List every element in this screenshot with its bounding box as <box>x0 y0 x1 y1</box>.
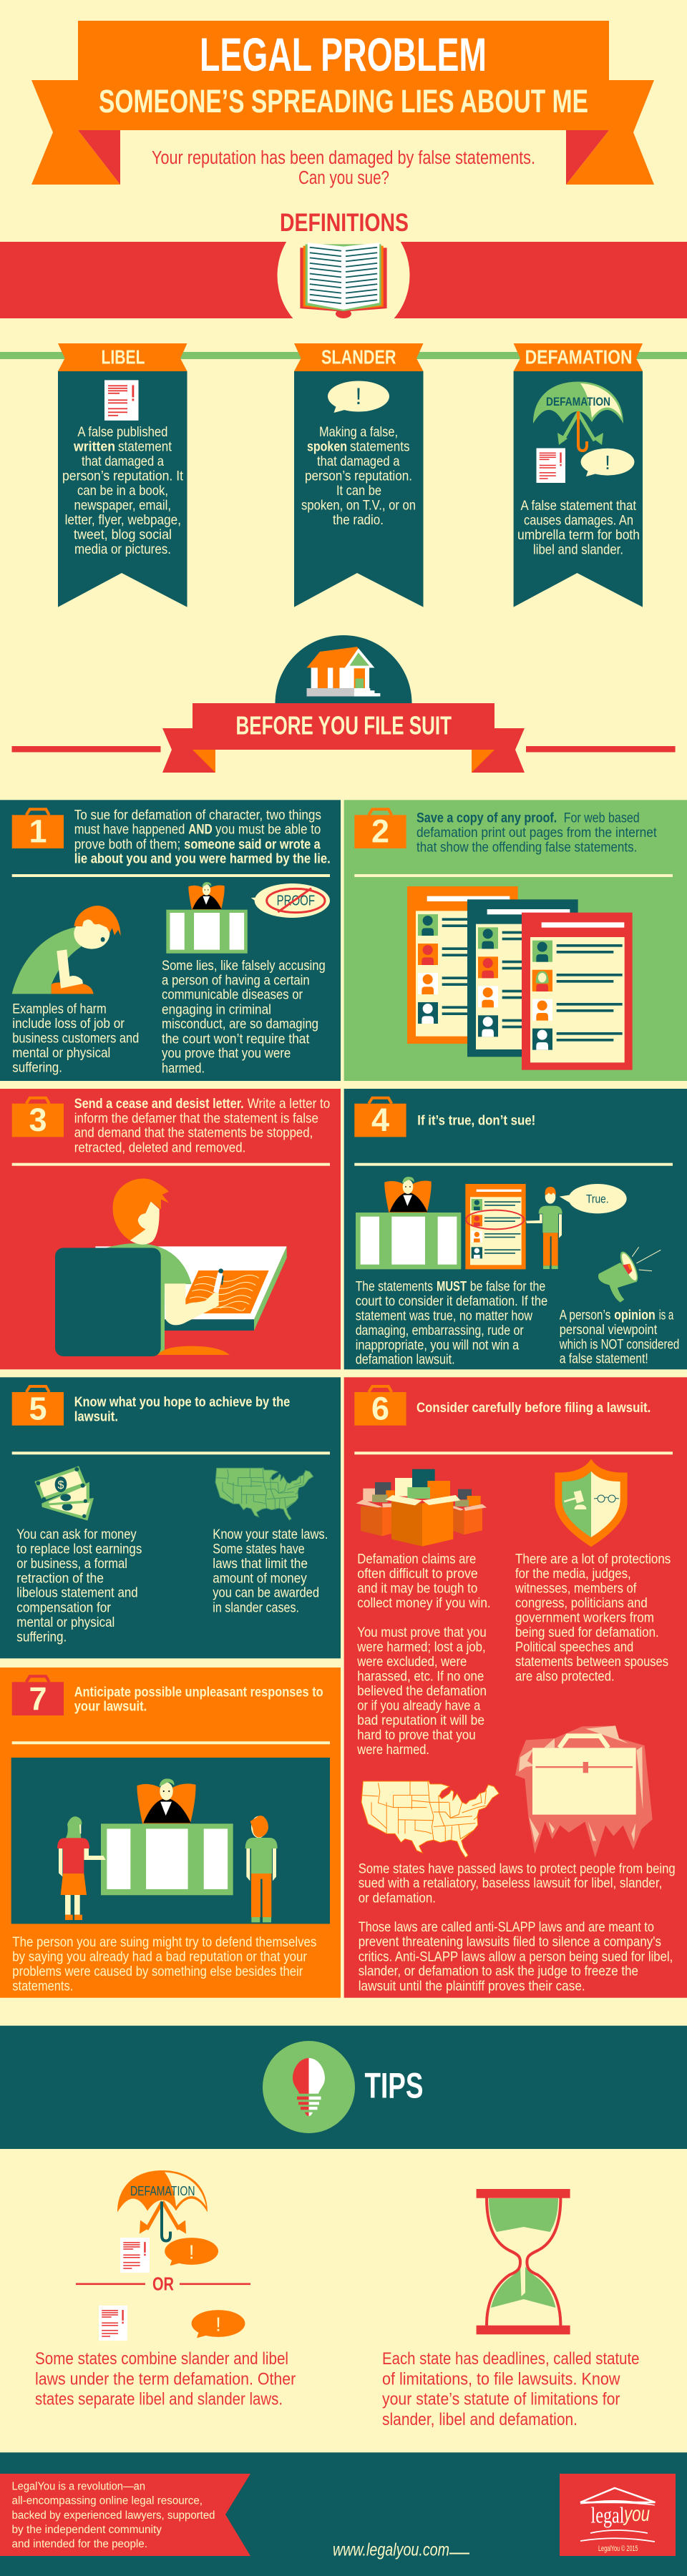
footer about ribbon: by the independent community <box>11 2524 162 2536</box>
defamation definition <box>517 498 640 558</box>
step 4 main text: statement was true, no matter how <box>356 1308 533 1323</box>
step 3 text: inform the defamer that the statement is false <box>74 1110 318 1126</box>
icon: combined speech bubble <box>165 2238 218 2266</box>
tip text: deadlines: of limitations, to file lawsuits. Know <box>382 2369 620 2389</box>
illustration: witness saying true <box>526 1184 627 1269</box>
step 6 protections text: congress, politicians and <box>515 1595 648 1611</box>
step 6 protections text: witnesses, members of <box>515 1580 637 1596</box>
icon: briefcase 5 <box>12 1386 64 1426</box>
panel: step 4 <box>344 1089 687 1369</box>
libel definition: statement <box>118 439 172 455</box>
icon: briefcase 2 <box>354 809 406 850</box>
step 1 harm text: mental or physical <box>12 1045 110 1061</box>
icon: small speech bubble <box>581 449 634 476</box>
step 3 text: Send a cease and desist letter. <box>74 1096 244 1112</box>
icon: separate document <box>99 2306 127 2341</box>
step 5 state laws text: in slander cases. <box>213 1600 299 1615</box>
illustration: printed pages <box>407 886 633 1070</box>
step 6 protections text: being sued for defamation. <box>515 1625 659 1640</box>
step 5 state laws text: laws that limit the <box>213 1556 308 1572</box>
panel: slander ribbon <box>294 343 424 607</box>
step 1 intro: you must be able to <box>215 822 321 838</box>
step 6 difficulty text: believed the defamation <box>357 1683 487 1699</box>
panel: defamation ribbon <box>514 343 643 607</box>
step 6 difficulty text: and it may be tough to <box>357 1580 477 1596</box>
step 6 difficulty text: were harmed; lost a job, <box>356 1639 486 1655</box>
panel: defamation ribbon: DEFAMATION <box>525 346 633 368</box>
step 6 difficulty text: often difficult to prove <box>357 1566 478 1582</box>
step 7 text: by saying you already had a bad reputation or that your <box>12 1949 307 1965</box>
panel: step 6 <box>344 1377 687 1998</box>
libel definition: person’s reputation. It <box>62 468 184 484</box>
slander definition <box>301 424 416 528</box>
step 6 protections text <box>515 1551 671 1684</box>
step 2 text: that show the offending false statements. <box>416 840 637 856</box>
step 7 heading: Anticipate possible unpleasant responses to <box>74 1684 323 1700</box>
panel: step 3 <box>0 1089 341 1369</box>
slander definition: the radio. <box>333 512 384 528</box>
step 1 lies text: the court won’t require that <box>162 1031 310 1047</box>
step 3 text: and demand that the statements be stopped, <box>74 1125 313 1141</box>
step 1 intro: To sue for defamation of character, two things <box>74 807 321 823</box>
panel: step 2 <box>344 800 687 1081</box>
step 1 harm text: business customers and <box>12 1031 139 1047</box>
step 1 harm text: include loss of job or <box>12 1016 125 1032</box>
icon: orange umbrella <box>117 2170 208 2240</box>
icon: briefcase 7: 7 <box>29 1680 47 1717</box>
step 1 lies text: misconduct, are so damaging <box>162 1017 318 1032</box>
step 5 money text: compensation for <box>16 1600 111 1615</box>
step 2 text: Save a copy of any proof. <box>416 810 557 826</box>
step 1 harm text: suffering. <box>12 1060 62 1076</box>
definitions band <box>0 209 687 342</box>
panel: libel ribbon <box>58 343 187 607</box>
illustration: judge <box>356 1177 461 1269</box>
illustration: courtroom scene <box>11 1758 330 1924</box>
footer about ribbon: and intended for the people. <box>11 2538 147 2550</box>
step 6 difficulty text: harassed, etc. If no one <box>357 1668 484 1684</box>
icon: briefcase 6: 6 <box>371 1391 389 1426</box>
slander definition: spoken, on T.V., or on <box>301 498 416 514</box>
step 5 state laws text: amount of money <box>213 1570 307 1586</box>
step 6 protections text: are also protected. <box>515 1668 615 1684</box>
step 6 protections text: government workers from <box>515 1610 654 1626</box>
step 6 difficulty text: or if you already have a <box>357 1698 480 1713</box>
step 7 text: statements. <box>12 1978 73 1994</box>
icon: briefcase 1 <box>12 809 64 850</box>
step 1 intro: someone said or wrote a <box>184 836 321 852</box>
footer about ribbon: all-encompassing online legal resource, <box>11 2495 203 2507</box>
step 5 heading <box>74 1394 290 1424</box>
step 1 intro: lie about you and you were harmed by the lie. <box>74 851 331 867</box>
illustration: distressed man <box>12 906 121 994</box>
title banner: LEGAL PROBLEM <box>200 28 487 81</box>
step 7 text <box>12 1934 317 1994</box>
step 5 money text <box>16 1527 142 1645</box>
tips band <box>0 2026 687 2149</box>
step 4 main text: defamation lawsuit. <box>356 1352 455 1368</box>
step 6 difficulty text: were harmed. <box>356 1742 429 1758</box>
icon: briefcase 4 <box>354 1098 406 1138</box>
step 1 lies text: harmed. <box>162 1060 205 1076</box>
icon: briefcase 4: 4 <box>371 1102 389 1138</box>
tip text: combine laws: states separate libel and slander laws. <box>35 2390 283 2409</box>
step 6 difficulty text: hard to prove that you <box>357 1728 476 1743</box>
step 4 main text <box>356 1278 547 1368</box>
step 5 heading: Know what you hope to achieve by the <box>74 1394 290 1410</box>
defamation definition: A false statement that <box>521 498 636 514</box>
step 5 state laws text: Know your state laws. <box>213 1527 328 1542</box>
step 5 money text: to replace lost earnings <box>16 1541 142 1557</box>
step 4 opinion text: opinion <box>614 1307 656 1323</box>
step 6 difficulty text: collect money if you win. <box>357 1595 491 1611</box>
panel: libel ribbon: LIBEL <box>102 346 145 368</box>
heading banner: before you file suit: BEFORE YOU FILE SUIT <box>236 711 452 740</box>
logo: legal <box>591 2502 625 2528</box>
libel definition <box>62 424 184 557</box>
illustration: witness saying true: True. <box>586 1192 609 1205</box>
intro text: Can you sue? <box>298 168 389 188</box>
slander definition: spoken <box>307 439 347 455</box>
footer <box>0 2452 687 2576</box>
defamation definition: libel and slander. <box>533 542 623 558</box>
step 2 text: defamation print out pages from the internet <box>416 825 657 841</box>
step 7 text: problems were caused by something else besides their <box>12 1964 303 1979</box>
step 6 anti-SLAPP text: slander, or defamation to ask the judge to freeze the <box>359 1964 638 1979</box>
icon: separate speech bubble <box>192 2310 245 2338</box>
step 4 main text: inappropriate, you will not win a <box>356 1338 519 1353</box>
step 2 text <box>416 810 657 856</box>
step 5 money text: mental or physical <box>16 1615 114 1630</box>
icon: shield with gavel and glasses <box>555 1459 628 1547</box>
step 4 main text: MUST <box>437 1278 467 1294</box>
step 1 harm text: Examples of harm <box>12 1001 107 1017</box>
icon: small speech bubble: ! <box>605 451 610 474</box>
illustration: boxes <box>356 1469 487 1547</box>
step 6 difficulty text: You must prove that you <box>357 1625 487 1640</box>
heading: tips: TIPS <box>365 2066 424 2106</box>
step 6 difficulty text: bad reputation it will be <box>357 1713 484 1728</box>
step 4 opinion text: a false statement! <box>560 1351 648 1367</box>
icon: money: $ <box>58 1479 64 1492</box>
libel definition: can be in a book, <box>77 483 168 499</box>
step 4 main text: be false for the <box>470 1278 545 1294</box>
step 6 difficulty text: Defamation claims are <box>357 1551 476 1567</box>
slander definition: Making a false, <box>319 424 398 440</box>
step 6 protections text: for the media, judges, <box>515 1566 631 1582</box>
illustration: judge with no proof bubble <box>166 882 330 954</box>
step 5 state laws text: Some states have <box>213 1541 305 1557</box>
step 5 state laws text <box>213 1527 328 1615</box>
defamation definition: causes damages. An <box>524 512 633 528</box>
icon: megaphone <box>598 1247 661 1303</box>
slander definition: It can be <box>336 483 381 499</box>
step 4 main text: court to consider it defamation. If the <box>356 1293 547 1309</box>
step 2 text: For web based <box>564 810 640 826</box>
icon: speech bubble <box>328 381 389 413</box>
libel definition: written <box>73 439 115 455</box>
defamation definition: umbrella term for both <box>517 527 640 543</box>
step 1 intro: prove both of them; <box>74 836 180 852</box>
step 1 intro: AND <box>188 822 213 838</box>
step 3 text <box>74 1096 330 1155</box>
icon: separate speech bubble: ! <box>215 2313 221 2335</box>
step 1 lies text: engaging in criminal <box>162 1001 271 1017</box>
libel definition: tweet, blog social <box>74 527 172 542</box>
step 6 anti-SLAPP text <box>359 1861 676 1994</box>
tip text: combine laws: laws under the term defamation. Other <box>35 2369 296 2389</box>
title banner <box>31 21 654 185</box>
heading banner: before you file suit <box>11 703 676 773</box>
icon: money <box>34 1466 94 1521</box>
libel definition: letter, flyer, webpage, <box>65 512 181 528</box>
libel definition: media or pictures. <box>74 542 171 557</box>
icon: hourglass <box>477 2189 570 2334</box>
step 4 main text: damaging, embarrassing, rude or <box>356 1323 524 1338</box>
icon: US map in cream <box>361 1781 499 1858</box>
step 6 protections text: Political speeches and <box>515 1639 633 1655</box>
step 6 difficulty text <box>356 1551 491 1758</box>
step 4 opinion text <box>559 1307 679 1367</box>
or divider: OR <box>152 2273 174 2295</box>
illustration: highlighted document <box>465 1184 526 1269</box>
icon: briefcase 6 <box>354 1386 406 1426</box>
step 5 money text: suffering. <box>16 1629 67 1645</box>
illustration: judge with no proof bubble: PROOF <box>277 893 315 909</box>
step 3 text: retracted, deleted and removed. <box>74 1140 245 1155</box>
step 1 intro: must have happened <box>74 822 185 838</box>
panel: step 1 <box>0 800 341 1081</box>
icon: briefcase 7 <box>12 1676 64 1717</box>
icon: small document <box>537 448 565 483</box>
step 7 heading <box>74 1684 323 1715</box>
step 4 opinion text: is a <box>659 1307 673 1323</box>
panel: slander ribbon: SLANDER <box>321 346 396 368</box>
icon: orange umbrella: DEFAMATION <box>130 2184 195 2198</box>
icon: umbrella <box>533 382 623 451</box>
icon: frozen briefcase <box>515 1725 653 1858</box>
icon: open book <box>300 243 387 318</box>
icon: briefcase 2: 2 <box>371 813 389 850</box>
step 4 opinion text: personal viewpoint <box>560 1322 658 1338</box>
step 5 money text: or business, a formal <box>16 1556 127 1572</box>
intro text <box>152 148 535 188</box>
icon: briefcase 5: 5 <box>29 1391 47 1426</box>
step 5 money text: You can ask for money <box>16 1527 137 1542</box>
icon: speech bubble: ! <box>356 383 361 409</box>
illustration: person writing at desk <box>55 1179 287 1356</box>
step 6 difficulty text: were excluded, were <box>356 1654 467 1670</box>
icon: combined document <box>120 2238 150 2273</box>
libel definition: A false published <box>77 424 167 440</box>
step 7 text: The person you are suing might try to defend themselves <box>12 1934 317 1950</box>
step 1 lies text: you prove that you were <box>162 1046 291 1062</box>
website url: www.legalyou.com <box>333 2540 449 2560</box>
icon: courthouse dome <box>275 635 412 703</box>
panel: step 5 <box>0 1377 341 1658</box>
icon: written document <box>104 380 139 421</box>
libel definition: newspaper, email, <box>74 498 171 514</box>
tip text: combine laws: Some states combine slander and libel <box>35 2349 288 2369</box>
step 1 lies text: communicable diseases or <box>162 987 303 1003</box>
tip text: deadlines: Each state has deadlines, called statute <box>382 2349 640 2369</box>
step 1 lies text: a person of having a certain <box>162 972 310 988</box>
footer about ribbon: LegalYou is a revolution—an <box>11 2481 145 2493</box>
step 4 opinion text: A person’s <box>560 1307 610 1323</box>
footer about ribbon <box>0 2474 250 2556</box>
tip text: deadlines: your state’s statute of limitations for <box>382 2390 620 2409</box>
step 6 anti-SLAPP text: or defamation. <box>359 1890 436 1906</box>
step 3 text: Write a letter to <box>248 1096 330 1112</box>
green rail <box>0 352 687 359</box>
panel: step 7 <box>0 1667 341 1998</box>
step 5 money text: libelous statement and <box>16 1585 138 1601</box>
step 1 intro <box>74 807 331 867</box>
icon: combined speech bubble: ! <box>189 2240 194 2263</box>
icon: briefcase 1: 1 <box>29 813 47 850</box>
slander definition: person’s reputation. <box>305 468 412 484</box>
logo <box>560 2474 676 2556</box>
icon: briefcase 3 <box>12 1098 64 1138</box>
intro text: Your reputation has been damaged by false statements. <box>152 148 535 168</box>
tip text: combine laws <box>35 2349 296 2409</box>
step 5 heading: lawsuit. <box>74 1409 118 1424</box>
step 7 heading: your lawsuit. <box>74 1699 147 1715</box>
logo: LegalYou © 2015 <box>598 2545 638 2553</box>
step 6 anti-SLAPP text: lawsuit until the plaintiff proves their case. <box>359 1978 585 1994</box>
icon: briefcase 3: 3 <box>29 1102 47 1138</box>
logo: you <box>623 2502 650 2526</box>
heading: definitions: DEFINITIONS <box>280 209 409 237</box>
step 1 lies text: Some lies, like falsely accusing <box>162 958 326 974</box>
icon: umbrella: DEFAMATION <box>546 395 610 408</box>
libel definition: that damaged a <box>82 454 164 469</box>
tip text: deadlines <box>382 2349 640 2429</box>
step 1 harm text <box>12 1001 139 1076</box>
step 1 lies text <box>162 958 326 1076</box>
step 4 main text: The statements <box>356 1278 433 1294</box>
footer about ribbon: backed by experienced lawyers, supported <box>11 2509 215 2522</box>
step 5 money text: retraction of the <box>16 1570 104 1586</box>
slander definition: that damaged a <box>317 454 400 469</box>
icon: light bulb <box>263 2041 355 2133</box>
slander definition: statements <box>350 439 410 455</box>
tip text: deadlines: slander, libel and defamation. <box>382 2410 578 2429</box>
icon: US map <box>215 1468 313 1520</box>
step 5 state laws text: you can be awarded <box>213 1585 319 1601</box>
step 4 heading: If it’s true, don’t sue! <box>417 1113 535 1129</box>
step 6 heading: Consider carefully before filing a lawsuit. <box>416 1400 651 1416</box>
